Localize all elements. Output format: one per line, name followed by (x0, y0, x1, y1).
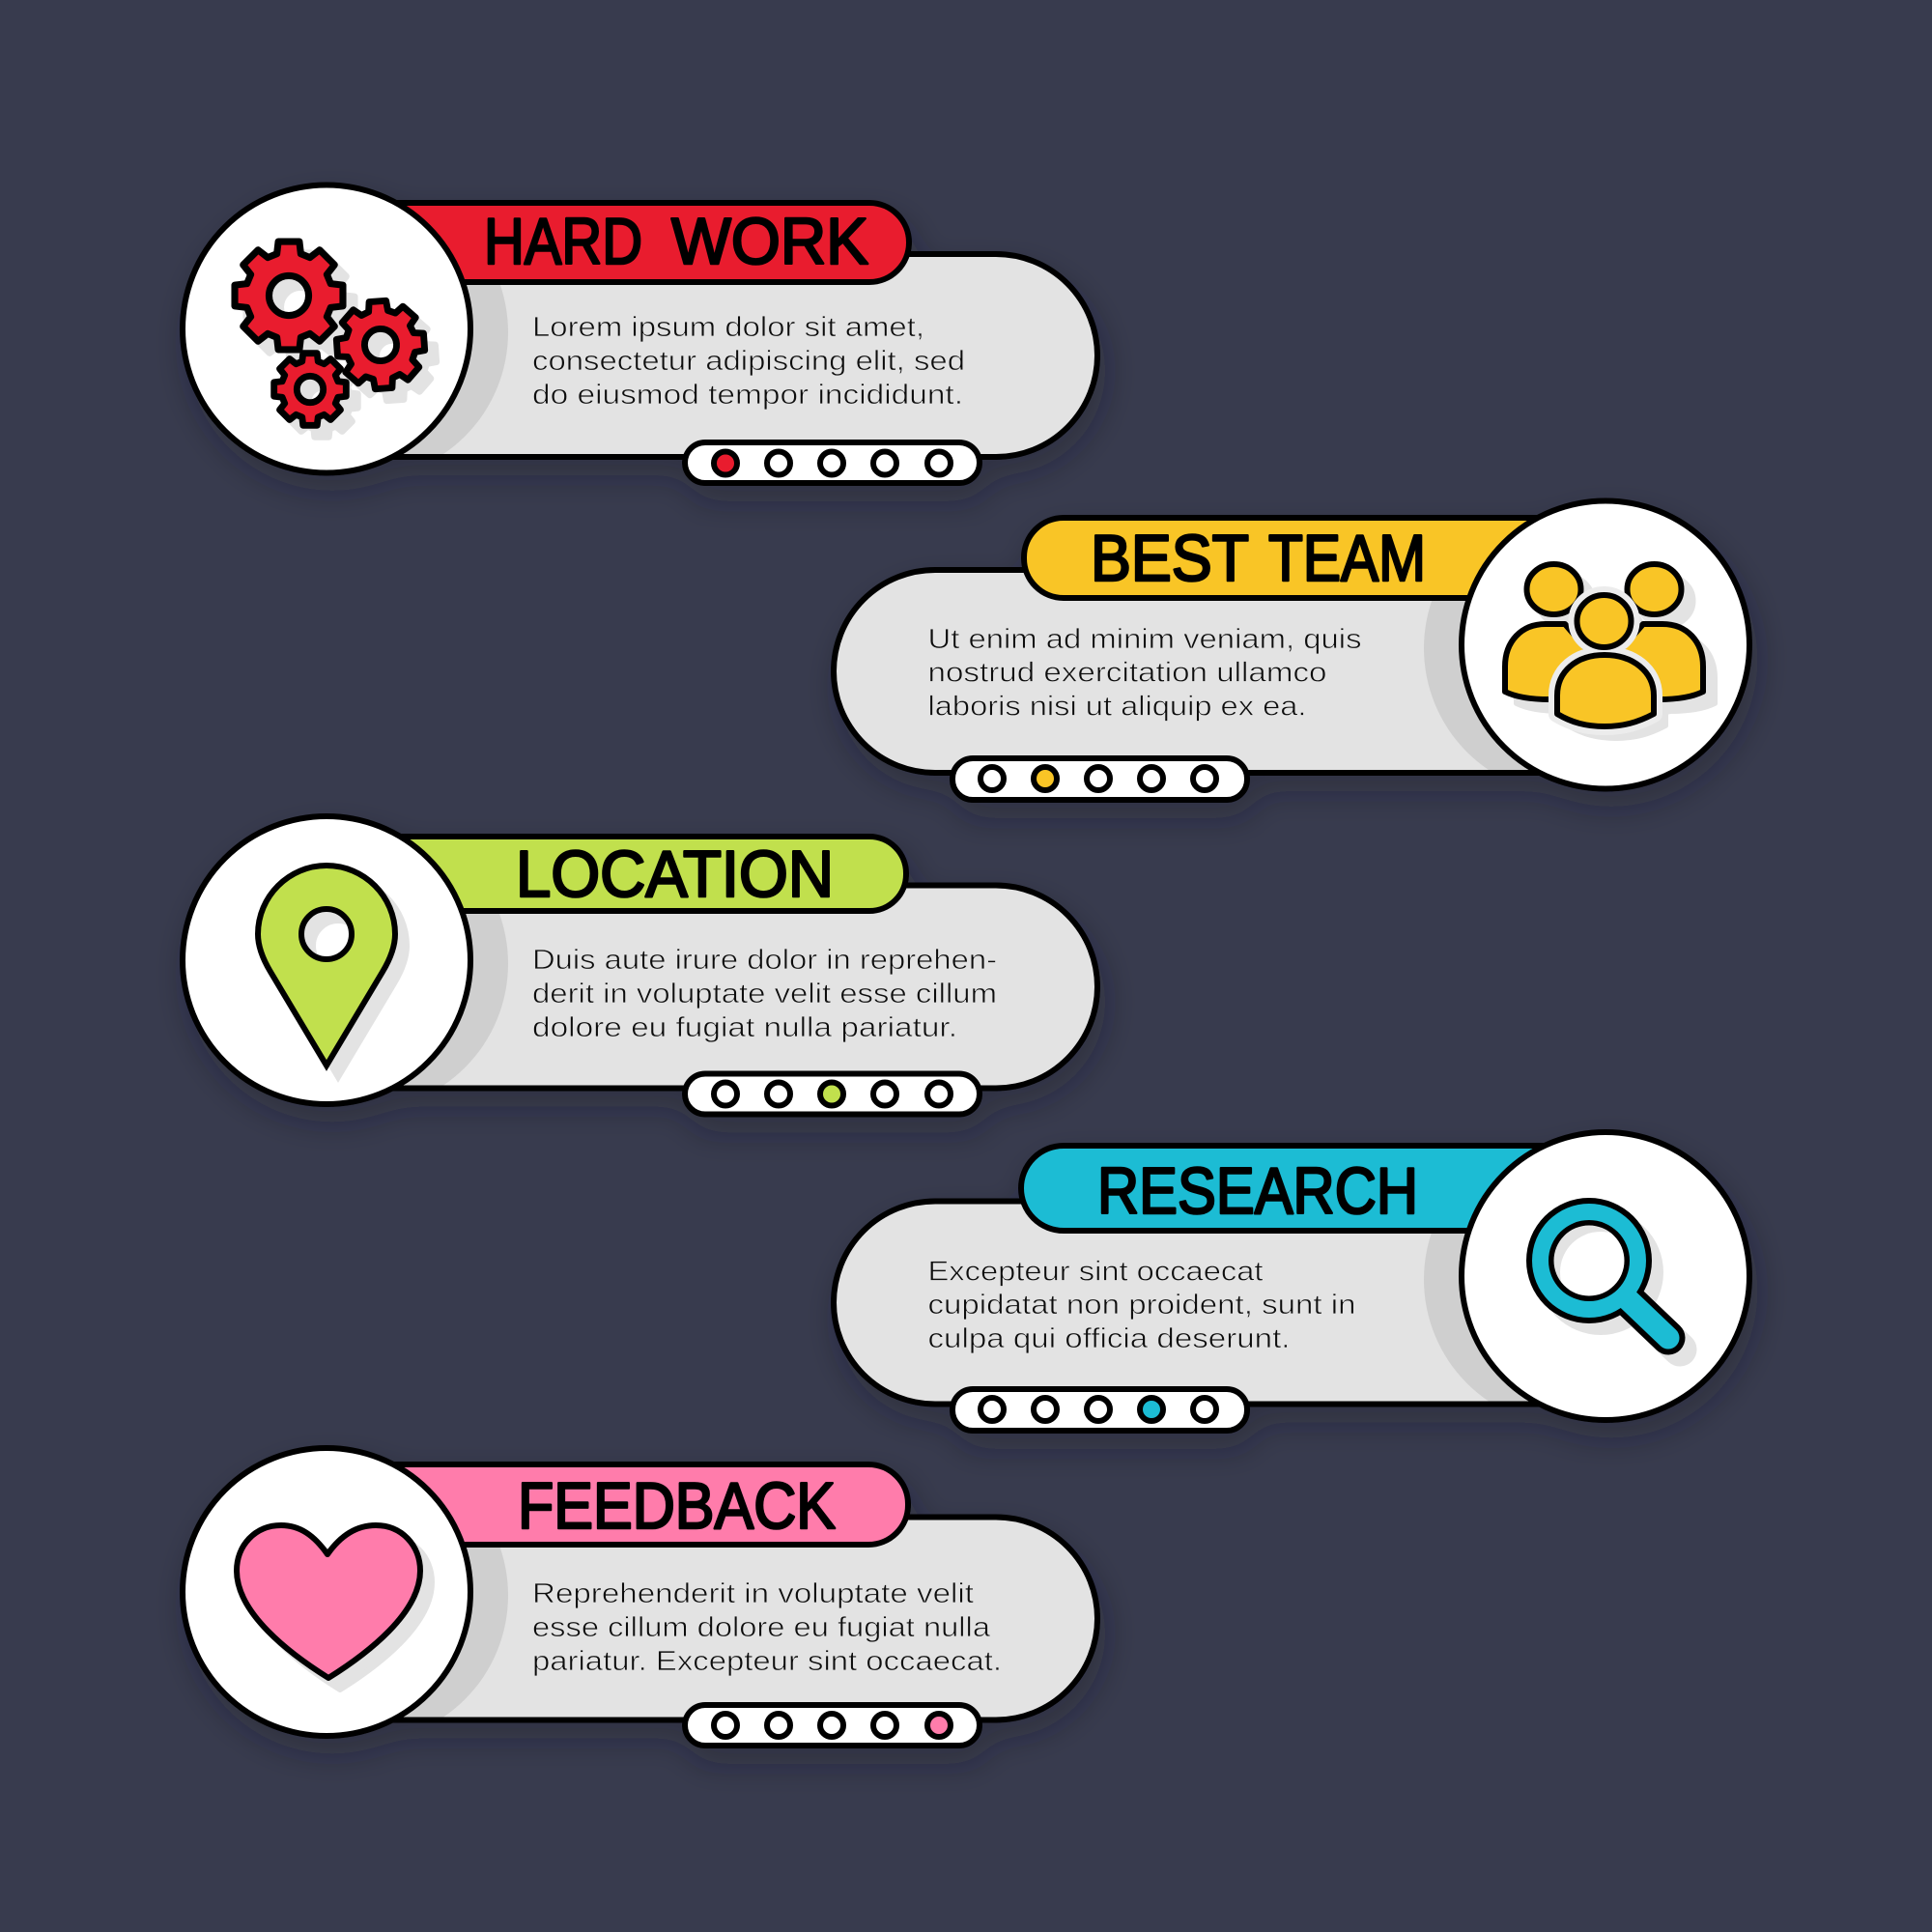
heading: hard work (327, 203, 909, 282)
icon: heart (237, 1525, 432, 1690)
heading: research: RESEARCH (1097, 1154, 1418, 1228)
heading: feedback (327, 1464, 908, 1545)
body text: Duis aute irure dolor in reprehen- (532, 945, 997, 976)
body text: consectetur adipiscing elit, sed (532, 346, 965, 377)
card shadow crescent (404, 914, 508, 1086)
heading: best team (1024, 518, 1605, 598)
body text: dolore eu fugiat nulla pariatur. (532, 1012, 957, 1043)
panel: hard work (183, 185, 1097, 483)
body text: Excepteur sint occaecat (927, 1256, 1264, 1287)
heading: location: LOCATION (516, 838, 834, 911)
icon: magnifier (1526, 1198, 1680, 1350)
body text: pariatur. Excepteur sint occaecat. (532, 1646, 1002, 1677)
panel: feedback (183, 1448, 1097, 1746)
body text (532, 312, 965, 411)
icon circle (1462, 1132, 1749, 1420)
icon circle (183, 185, 470, 473)
text card (242, 885, 1097, 1088)
body text: do eiusmod tempor incididunt. (532, 380, 963, 411)
heading: hard work: WORK (671, 205, 868, 278)
icon circle (1462, 500, 1749, 788)
progress dots (685, 442, 980, 483)
text card (834, 570, 1690, 773)
body text (927, 1256, 1356, 1354)
panel: best team (834, 500, 1749, 800)
body text: Reprehenderit in voluptate velit (532, 1578, 974, 1609)
progress dots (952, 758, 1247, 800)
text card (242, 1517, 1097, 1719)
card shadow crescent (1424, 601, 1528, 770)
heading: hard work: HARD (484, 205, 642, 278)
heading: best team: TEAM (1268, 522, 1426, 595)
body text: derit in voluptate velit esse cillum (532, 979, 997, 1009)
body text: nostrud exercitation ullamco (927, 657, 1327, 688)
heading: research (1021, 1146, 1605, 1231)
card shadow crescent (404, 1548, 508, 1718)
heading: best team: BEST (1091, 522, 1249, 595)
body text (532, 945, 997, 1043)
panel: location (183, 816, 1097, 1115)
panel: research (834, 1132, 1749, 1431)
icon circle (183, 1448, 470, 1736)
heading: feedback: FEEDBACK (518, 1469, 836, 1543)
text card (242, 254, 1097, 457)
heading: location (327, 837, 906, 911)
body text: laboris nisi ut aliquip ex ea. (927, 692, 1306, 723)
body text (927, 624, 1362, 723)
body text: Ut enim ad minim veniam, quis (927, 624, 1362, 655)
progress dots (952, 1389, 1247, 1431)
body text (532, 1578, 1002, 1677)
body text: Lorem ipsum dolor sit amet, (532, 312, 924, 343)
progress dots (685, 1705, 980, 1746)
body text: cupidatat non proident, sunt in (927, 1290, 1356, 1321)
icon circle (183, 816, 470, 1104)
card shadow crescent (404, 285, 508, 454)
body text: culpa qui officia deserunt. (927, 1323, 1291, 1354)
card shadow crescent (1424, 1234, 1528, 1401)
icon: gears (235, 242, 439, 437)
progress dots (685, 1074, 980, 1115)
icon: map pin (258, 866, 407, 1077)
body text: esse cillum dolore eu fugiat nulla (532, 1612, 991, 1643)
text card (834, 1202, 1690, 1405)
icon: team (1505, 564, 1715, 738)
